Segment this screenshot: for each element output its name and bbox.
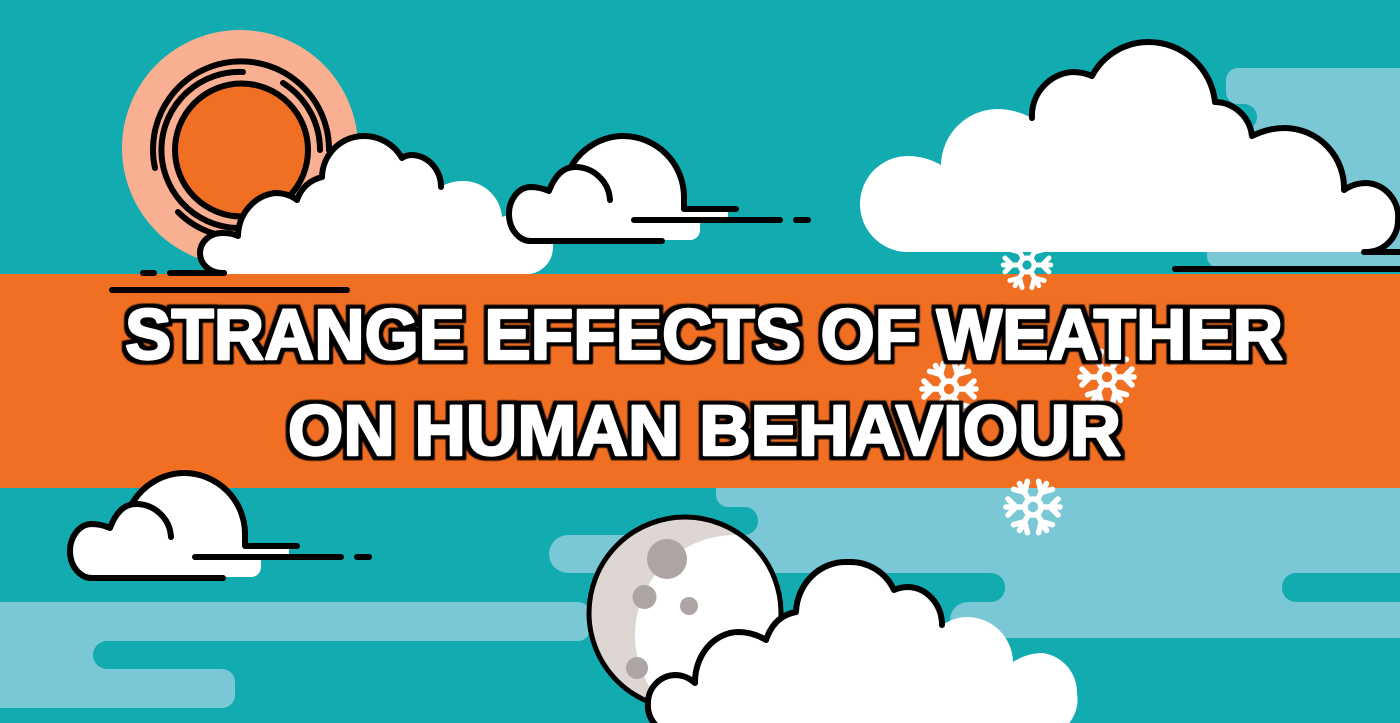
title — [125, 296, 1283, 471]
icon: snowflake left of title — [922, 362, 976, 416]
haze bands: lower right — [549, 480, 1400, 638]
small cloud top centre — [509, 136, 808, 241]
orange title band — [0, 274, 1400, 488]
icon: snowflake under large cloud — [1003, 241, 1051, 289]
icon: sun — [122, 30, 358, 266]
small cloud lower left — [70, 473, 369, 578]
icon: moon — [586, 514, 784, 703]
haze bands: top right — [1207, 68, 1400, 268]
cloud in front of sun — [200, 136, 553, 274]
title: STRANGE EFFECTS OF WEATHER — [125, 296, 1283, 375]
icon: snowflake below band — [1006, 480, 1060, 534]
large cloud top right — [860, 42, 1400, 269]
icon: snowflake right of title — [1080, 350, 1134, 404]
haze bands: lower left — [0, 602, 590, 708]
cloud in front of moon — [648, 562, 1078, 723]
title: ON HUMAN BEHAVIOUR — [288, 392, 1121, 471]
wind lines at lower left of sun cloud — [112, 273, 347, 290]
